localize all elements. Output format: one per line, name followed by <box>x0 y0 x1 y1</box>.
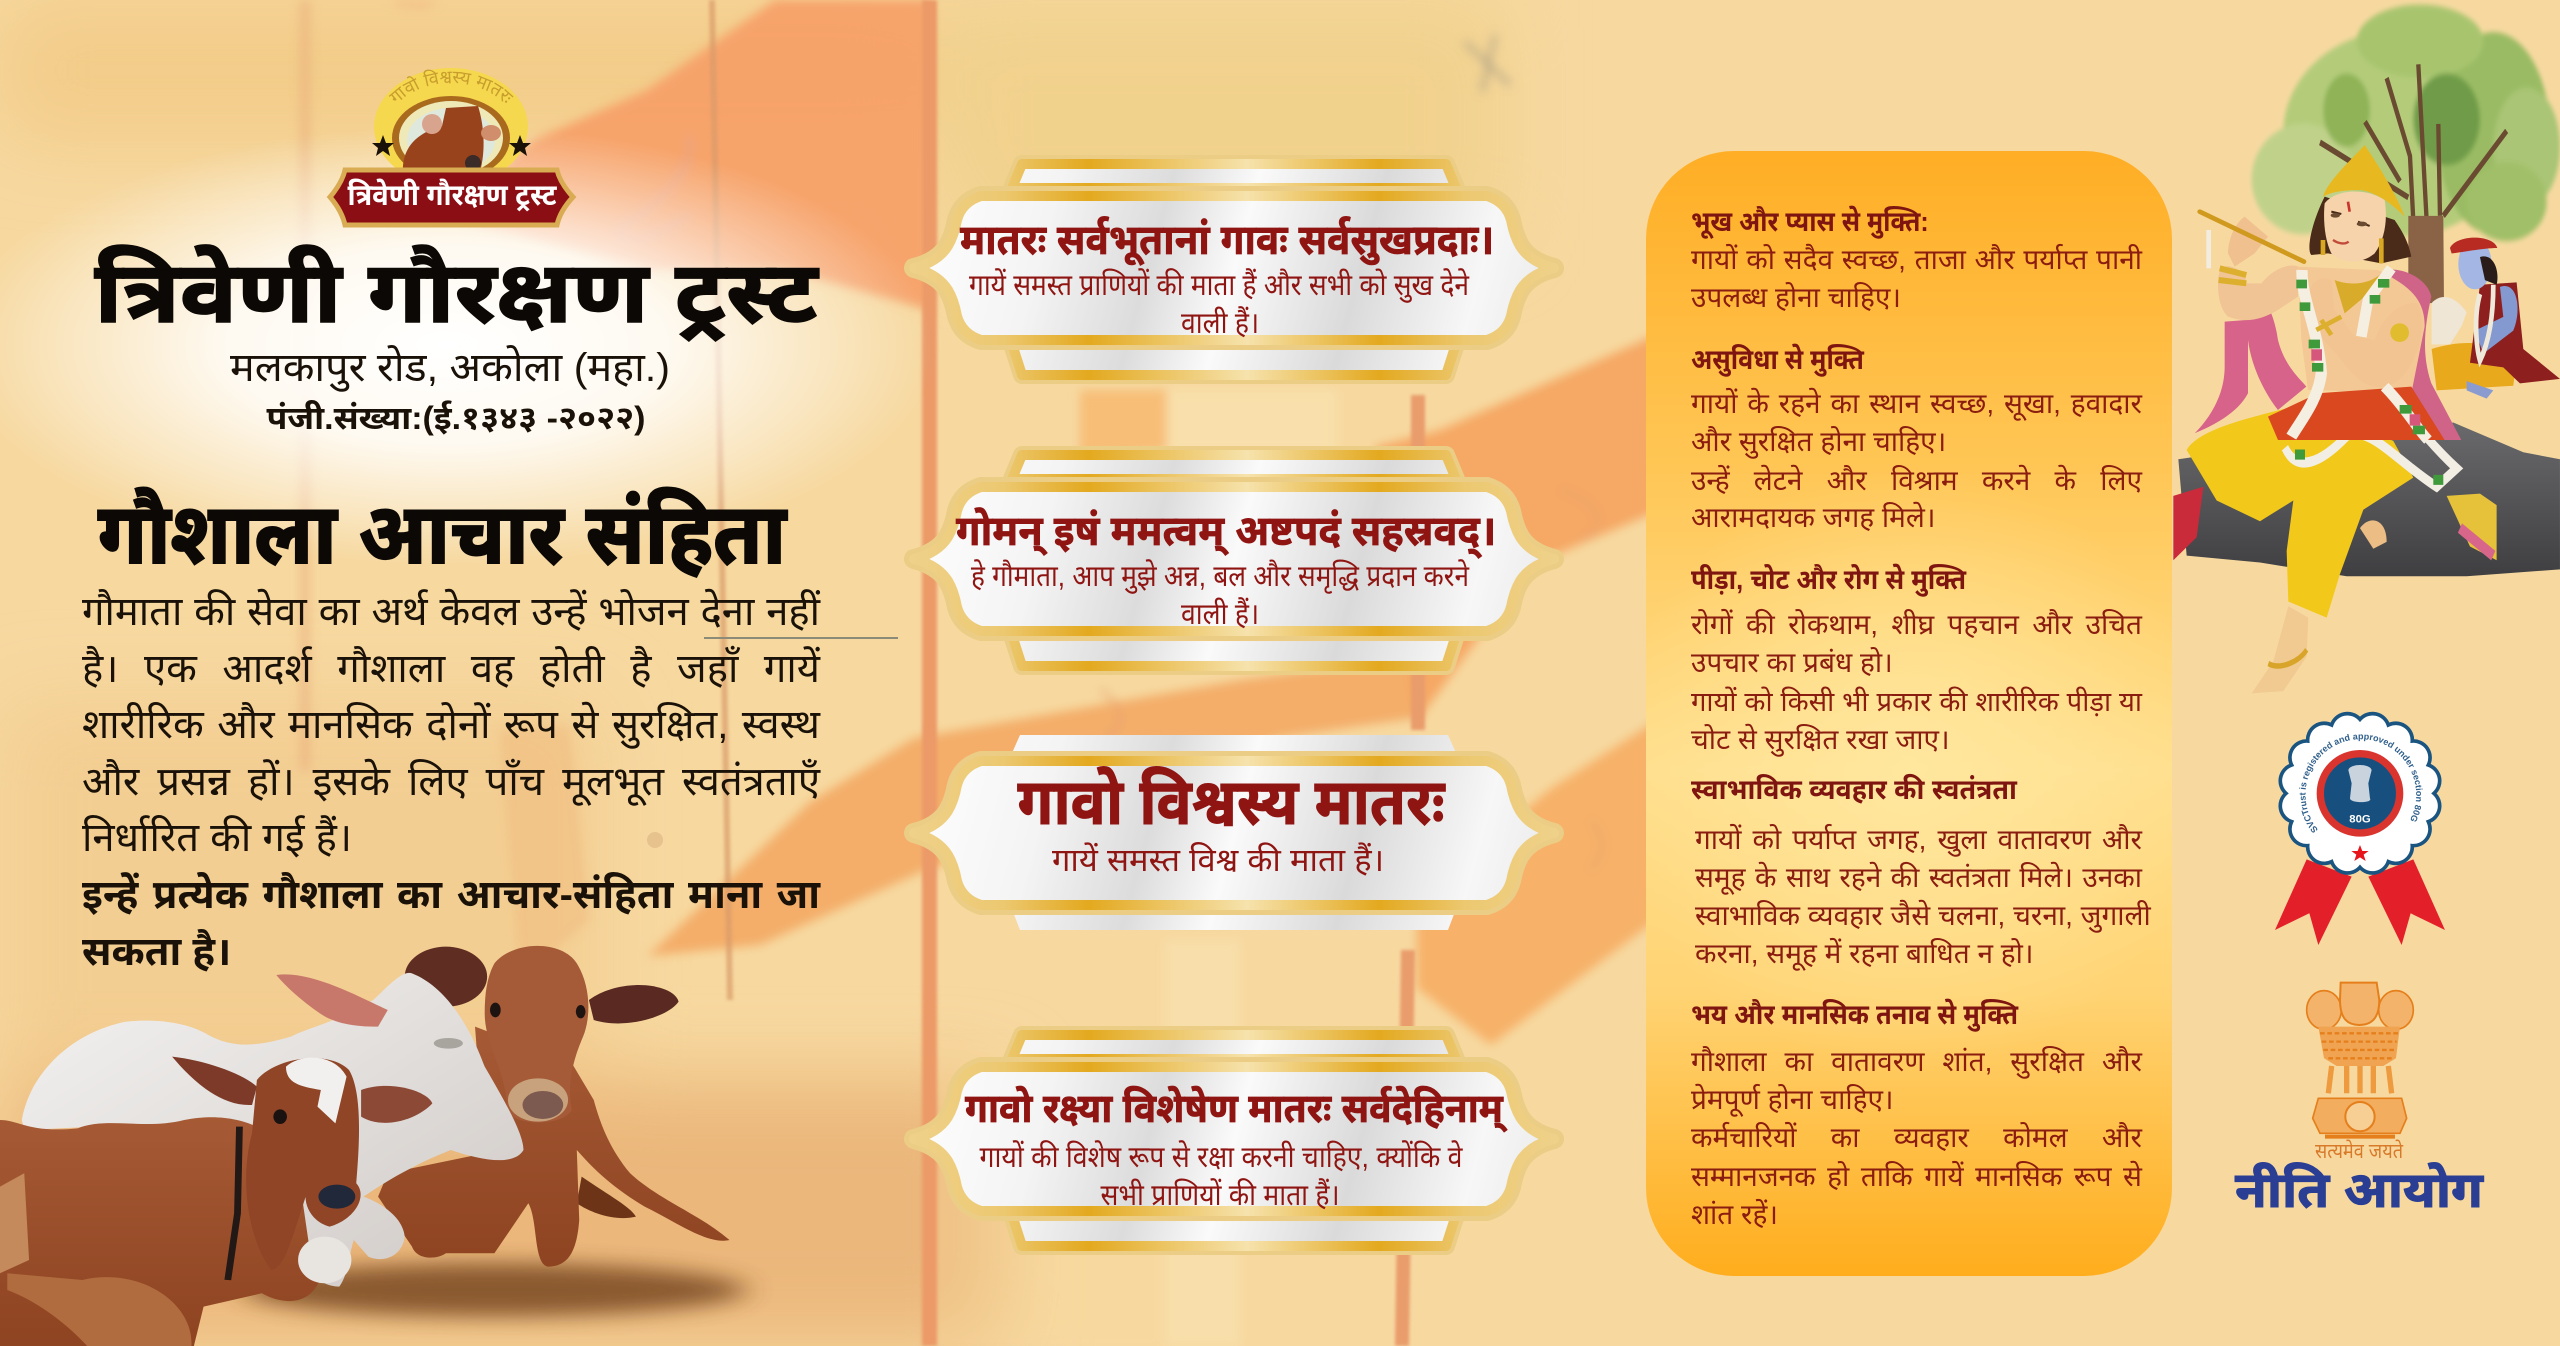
front arm <box>2307 278 2422 387</box>
panel: five freedoms: और सुरक्षित होना चाहिए। <box>1691 426 1946 457</box>
hair <box>2309 197 2411 263</box>
white cow <box>22 973 523 1287</box>
panel: five freedoms: शांत रहें। <box>1691 1199 1778 1230</box>
panel: five freedoms: प्रेमपूर्ण होना चाहिए। <box>1691 1084 1894 1115</box>
illustration: tree, calf, small Krishna and rock <box>2173 5 2560 693</box>
intro paragraph: सकता है। <box>82 930 231 974</box>
banner 2 text <box>956 507 1496 631</box>
seal disc: 80G <box>2349 814 2371 826</box>
panel: five freedoms: उपचार का प्रबंध हो। <box>1691 647 1893 678</box>
emblem motto: सत्यमेव जयते <box>2315 1139 2404 1163</box>
80G certification seal <box>2275 712 2445 945</box>
seal disc <box>2278 712 2442 875</box>
cows illustration <box>0 946 746 1346</box>
banner 2 text: हे गौमाता, आप मुझे अन्न, बल और समृद्धि प्रदान करने <box>971 558 1470 595</box>
address line: मलकापुर रोड, अकोला (महा.) <box>230 345 670 391</box>
intro paragraph: है। एक आदर्श गौशाला वह होती है जहाँ गायें <box>82 647 820 691</box>
face <box>2323 192 2386 263</box>
raised hand <box>2228 217 2268 267</box>
logo: trust emblem <box>326 68 576 228</box>
panel: five freedoms: स्वाभाविक व्यवहार की स्वतंत्रता <box>1691 774 2017 805</box>
flute tassel <box>2202 230 2216 268</box>
banner 4 <box>914 1035 1554 1246</box>
title: trust name: त्रिवेणी गौरक्षण ट्रस्ट <box>94 244 819 342</box>
logo: trust emblem: गावो विश्वस्य मातरः <box>388 70 514 103</box>
panel: five freedoms: सम्मानजनक हो ताकि गायें मानसिक रूप से <box>1691 1161 2142 1192</box>
front calf <box>0 1057 432 1346</box>
panel: five freedoms: असुविधा से मुक्ति <box>1691 344 1864 375</box>
garlands <box>2291 268 2428 440</box>
raised arm <box>2218 265 2298 320</box>
panel: five freedoms: उपलब्ध होना चाहिए। <box>1691 282 1901 313</box>
banner 3 <box>914 735 1554 930</box>
panel: five freedoms: गायों के रहने का स्थान स्वच्छ, सूखा, हवादार <box>1691 388 2142 419</box>
intro paragraph <box>22 588 821 1300</box>
intro paragraph: गौमाता की सेवा का अर्थ केवल उन्हें भोजन देना नहीं <box>82 590 820 634</box>
flute <box>2200 212 2304 262</box>
panel: five freedoms: समूह के साथ रहने की स्वतंत्रता मिले। उनका <box>1695 862 2142 893</box>
stole right <box>2378 269 2461 440</box>
illustration: Krishna upper body playing flute <box>2195 145 2461 440</box>
banner 1 text: गायें समस्त प्राणियों की माता हैं और सभी को सुख देने <box>969 267 1470 303</box>
banner 2 text: वाली हैं। <box>1181 597 1259 631</box>
panel: five freedoms: गायों को किसी भी प्रकार की शारीरिक पीड़ा या <box>1691 686 2142 717</box>
banner 1 <box>914 164 1554 375</box>
necklace <box>2335 273 2381 313</box>
small Krishna with calf <box>2432 238 2560 399</box>
intro paragraph: और प्रसन्न हों। इसके लिए पाँच मूलभूत स्वतंत्रताएँ <box>82 760 820 804</box>
panel: five freedoms: स्वाभाविक व्यवहार जैसे चलना, चरना, जुगाली <box>1695 900 2151 931</box>
glow behind title <box>0 125 937 565</box>
armlet <box>2390 323 2409 342</box>
panel: five freedoms: गौशाला का वातावरण शांत, सुरक्षित और <box>1691 1046 2142 1077</box>
panel: five freedoms: गायों को सदैव स्वच्छ, ताजा और पर्याप्त पानी <box>1691 244 2142 275</box>
torso <box>2298 267 2425 393</box>
panel: five freedoms: आरामदायक जगह मिले। <box>1691 502 1936 533</box>
right brown cow <box>378 946 729 1267</box>
heading: gaushala code of conduct: गौशाला आचार संहिता <box>98 487 787 581</box>
rock <box>2178 422 2560 576</box>
banner 4 text: गायों की विशेष रूप से रक्षा करनी चाहिए, क्योंकि वे <box>980 1139 1464 1174</box>
intro paragraph: शारीरिक और मानसिक दोनों रूप से सुरक्षित, स्वस्थ <box>82 703 820 747</box>
panel: five freedoms: उन्हें लेटने और विश्राम करने के लिए <box>1691 465 2142 496</box>
panel: five freedoms: भय और मानसिक तनाव से मुक्ति <box>1691 999 2018 1030</box>
banner 1 text <box>960 216 1494 340</box>
panel: five freedoms: रोगों की रोकथाम, शीघ्र पहचान और उचित <box>1691 609 2142 640</box>
stole and drape, left <box>2195 283 2306 433</box>
seal disc: SVCTrust is registered and approved under section 80G <box>2299 734 2422 833</box>
bangles <box>2219 268 2246 283</box>
sash <box>2268 387 2445 440</box>
panel: five freedoms: भूख और प्यास से मुक्ति: <box>1691 206 1929 237</box>
panel: five freedoms: पीड़ा, चोट और रोग से मुक्ति <box>1691 564 1966 595</box>
banner 3 text: गायें समस्त विश्व की माता हैं। <box>1052 842 1384 878</box>
banner 4 text: सभी प्राणियों की माता हैं। <box>1100 1178 1340 1212</box>
crown <box>2323 145 2405 217</box>
registration number: पंजी.संख्या:(ई.१३४३ -२०२२) <box>266 400 646 436</box>
logo: trust emblem: त्रिवेणी गौरक्षण ट्रस्ट <box>348 177 557 213</box>
panel: five freedoms: गायों को पर्याप्त जगह, खुला वातावरण और <box>1695 824 2142 855</box>
banner 4 text: गावो रक्ष्या विशेषेण मातरः सर्वदेहिनाम् <box>965 1086 1508 1133</box>
panel: five freedoms: करना, समूह में रहना बाधित न हो। <box>1695 938 2034 969</box>
Krishna lower body: dhoti and legs <box>2173 381 2497 693</box>
panel: five freedoms: चोट से सुरक्षित रखा जाए। <box>1691 724 1950 755</box>
banner 1 text: मातरः सर्वभूतानां गावः सर्वसुखप्रदाः। <box>960 216 1494 266</box>
ribbon <box>2275 859 2445 945</box>
banner 4 text <box>965 1086 1508 1212</box>
panel: five freedoms: कर्मचारियों का व्यवहार कोमल और <box>1691 1122 2142 1153</box>
banner 2 <box>914 455 1554 666</box>
panel: five freedoms <box>1646 151 2172 1276</box>
banner 3 text: गावो विश्वस्य मातरः <box>1018 766 1446 838</box>
intro paragraph: निर्धारित की गई हैं। <box>82 816 352 860</box>
NITI Aayog wordmark: नीति आयोग <box>2235 1162 2484 1218</box>
national emblem <box>2307 983 2413 1137</box>
banner 3 text <box>1018 766 1446 878</box>
banner 1 text: वाली हैं। <box>1181 306 1259 340</box>
banner 2 text: गोमन् इषं ममत्वम् अष्टपदं सहस्रवद्। <box>956 507 1496 559</box>
tree <box>2252 5 2560 303</box>
intro paragraph: इन्हें प्रत्येक गौशाला का आचार-संहिता माना जा <box>82 873 820 917</box>
